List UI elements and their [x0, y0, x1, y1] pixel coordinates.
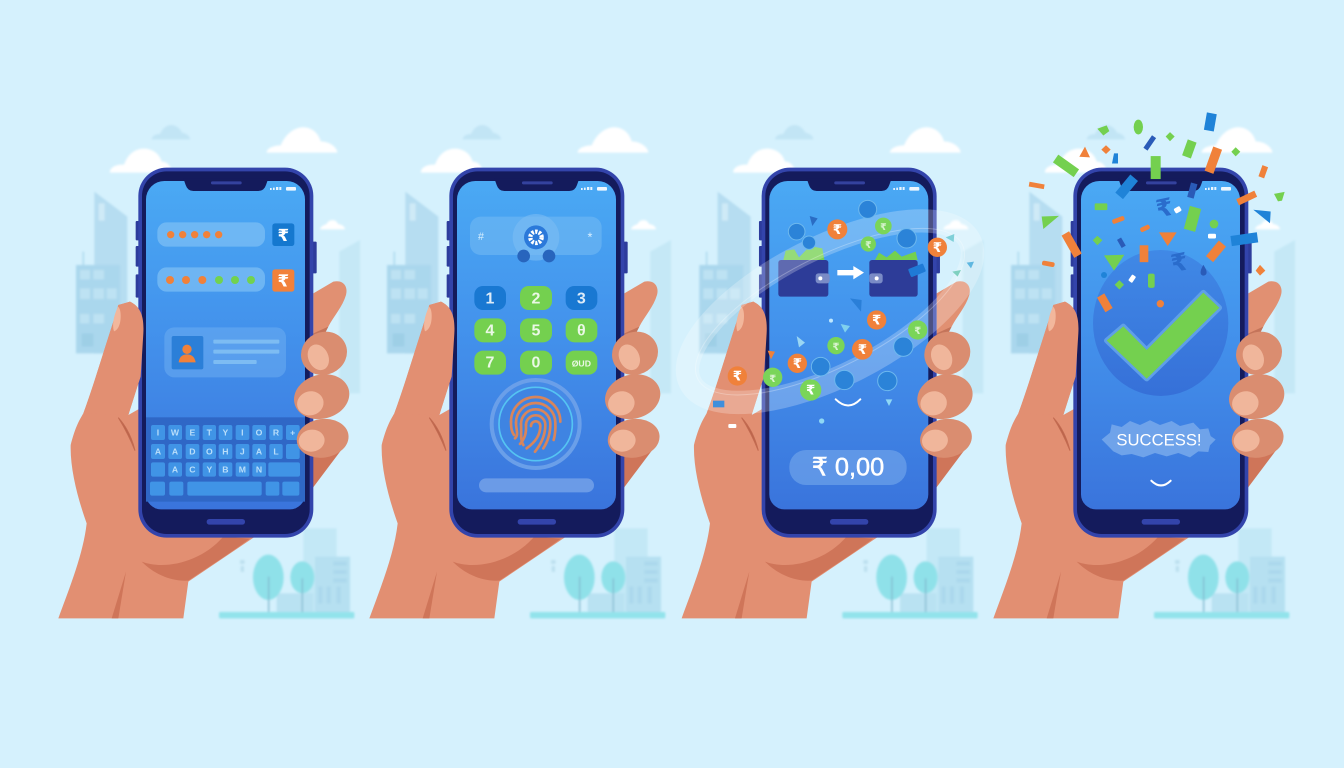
- falling rupee symbols: [1154, 194, 1191, 278]
- green confetti: [1042, 120, 1285, 290]
- rupee symbols on coins: ₹: [833, 222, 842, 237]
- hand thumb and fingers: [707, 302, 978, 461]
- security header: *: [588, 230, 593, 244]
- rupee symbols on coins: ₹: [833, 342, 840, 353]
- amount pill: ₹ 0,00: [812, 454, 884, 482]
- keyboard: Y: [222, 428, 228, 438]
- keyboard: M: [239, 465, 246, 475]
- rupee button blue: [272, 223, 294, 246]
- transfer arrow: [837, 266, 864, 279]
- white confetti: [1128, 206, 1216, 283]
- panel: step 4 success: [993, 112, 1295, 618]
- rupee symbols on coins: ₹: [865, 240, 872, 250]
- city background: [699, 125, 983, 618]
- city background: [387, 125, 671, 618]
- glass swirl ribbon: [662, 184, 998, 439]
- amount pill: [789, 450, 907, 485]
- rupee symbols on coins: ₹: [858, 342, 867, 357]
- keyboard: B: [222, 465, 228, 475]
- keyboard: A: [155, 447, 162, 457]
- rupee button orange: [272, 269, 294, 292]
- small particles: [713, 216, 974, 428]
- keyboard: I: [241, 428, 244, 438]
- number keypad: 1: [486, 291, 495, 308]
- number keypad: 4: [486, 323, 495, 340]
- orange confetti: [1029, 145, 1268, 312]
- check circle: [1093, 250, 1228, 396]
- keyboard: [146, 417, 305, 502]
- smile: [836, 399, 860, 405]
- blue confetti: [1101, 112, 1271, 278]
- rupee symbols on coins: ₹: [733, 369, 742, 384]
- success badge: [1102, 420, 1216, 457]
- hand thumb and fingers: [1018, 302, 1289, 461]
- smile: [1151, 481, 1171, 485]
- city background: [76, 125, 360, 618]
- keyboard: Y: [206, 465, 212, 475]
- keyboard: +: [290, 428, 295, 438]
- falling rupee symbols: ₹: [1169, 248, 1191, 278]
- number keypad: [474, 286, 597, 375]
- panel: step 2 PIN and fingerprint: [369, 125, 671, 618]
- rupee button orange: ₹: [278, 272, 289, 291]
- confetti burst: [1029, 112, 1285, 312]
- keyboard: N: [256, 465, 262, 475]
- number keypad: 7: [486, 355, 495, 372]
- rupee symbols on coins: ₹: [806, 383, 815, 398]
- success badge: SUCCESS!: [1116, 431, 1202, 450]
- dark blue confetti: [1117, 135, 1207, 276]
- login screen content: [146, 222, 305, 502]
- success screen content: [1093, 250, 1228, 485]
- security header: [470, 214, 602, 262]
- rupee symbols on coins: ₹: [793, 356, 802, 371]
- falling rupee symbols: ₹: [1154, 194, 1176, 224]
- green check mark: [1107, 293, 1219, 379]
- city background: [1011, 125, 1295, 618]
- number keypad: 3: [577, 291, 586, 308]
- phone: [759, 168, 940, 538]
- number keypad: ØUD: [572, 358, 591, 368]
- rupee symbols on coins: ₹: [769, 374, 776, 385]
- orange coins: [728, 219, 947, 386]
- phone: [447, 168, 628, 538]
- swirl of coins: [662, 184, 998, 439]
- keyboard: R: [273, 428, 280, 438]
- rupee symbols on coins: ₹: [872, 313, 881, 328]
- phone: [1071, 168, 1252, 538]
- hand palm: [993, 281, 1282, 618]
- number keypad: 5: [532, 323, 541, 340]
- keyboard: C: [189, 465, 196, 475]
- PIN screen content: [470, 214, 602, 492]
- keyboard: T: [207, 428, 213, 438]
- destination wallet: [869, 251, 926, 297]
- hand thumb and fingers: [83, 302, 354, 461]
- keyboard: H: [222, 447, 228, 457]
- rupee symbols on coins: [733, 222, 942, 398]
- keyboard: A: [172, 447, 179, 457]
- phone: [136, 168, 317, 538]
- blue coins: [788, 200, 916, 391]
- confirm bar: [479, 478, 594, 492]
- hand palm: [369, 281, 658, 618]
- profile card: [164, 327, 286, 377]
- number keypad: θ: [577, 323, 586, 340]
- keyboard: O: [256, 428, 263, 438]
- transfer screen content: [778, 246, 926, 485]
- green coins: [763, 218, 927, 401]
- hand thumb and fingers: [394, 302, 665, 461]
- rupee symbols on coins: ₹: [914, 326, 921, 337]
- keyboard: W: [171, 428, 180, 438]
- input field with mixed dots: [157, 267, 265, 292]
- rupee symbols on coins: ₹: [880, 222, 887, 232]
- source wallet: [778, 246, 830, 297]
- security header: #: [478, 231, 484, 243]
- keyboard: I: [157, 428, 159, 438]
- panel: step 1 enter details: [58, 125, 360, 618]
- rupee symbols on coins: ₹: [933, 240, 942, 255]
- rupee button blue: ₹: [278, 226, 289, 245]
- keyboard: A: [172, 465, 179, 475]
- hand palm: [58, 281, 347, 618]
- number keypad: 0: [532, 355, 541, 372]
- keyboard: A: [256, 447, 263, 457]
- keyboard: E: [189, 428, 195, 438]
- number keypad: 2: [532, 291, 541, 308]
- fingerprint sensor: [492, 380, 580, 468]
- keyboard: O: [206, 447, 213, 457]
- keyboard: D: [189, 447, 195, 457]
- input field with orange dots: [157, 222, 265, 247]
- panel: step 3 money transfer: [662, 125, 998, 618]
- hand palm: [682, 281, 970, 618]
- keyboard: L: [273, 447, 279, 457]
- keyboard: J: [240, 447, 245, 457]
